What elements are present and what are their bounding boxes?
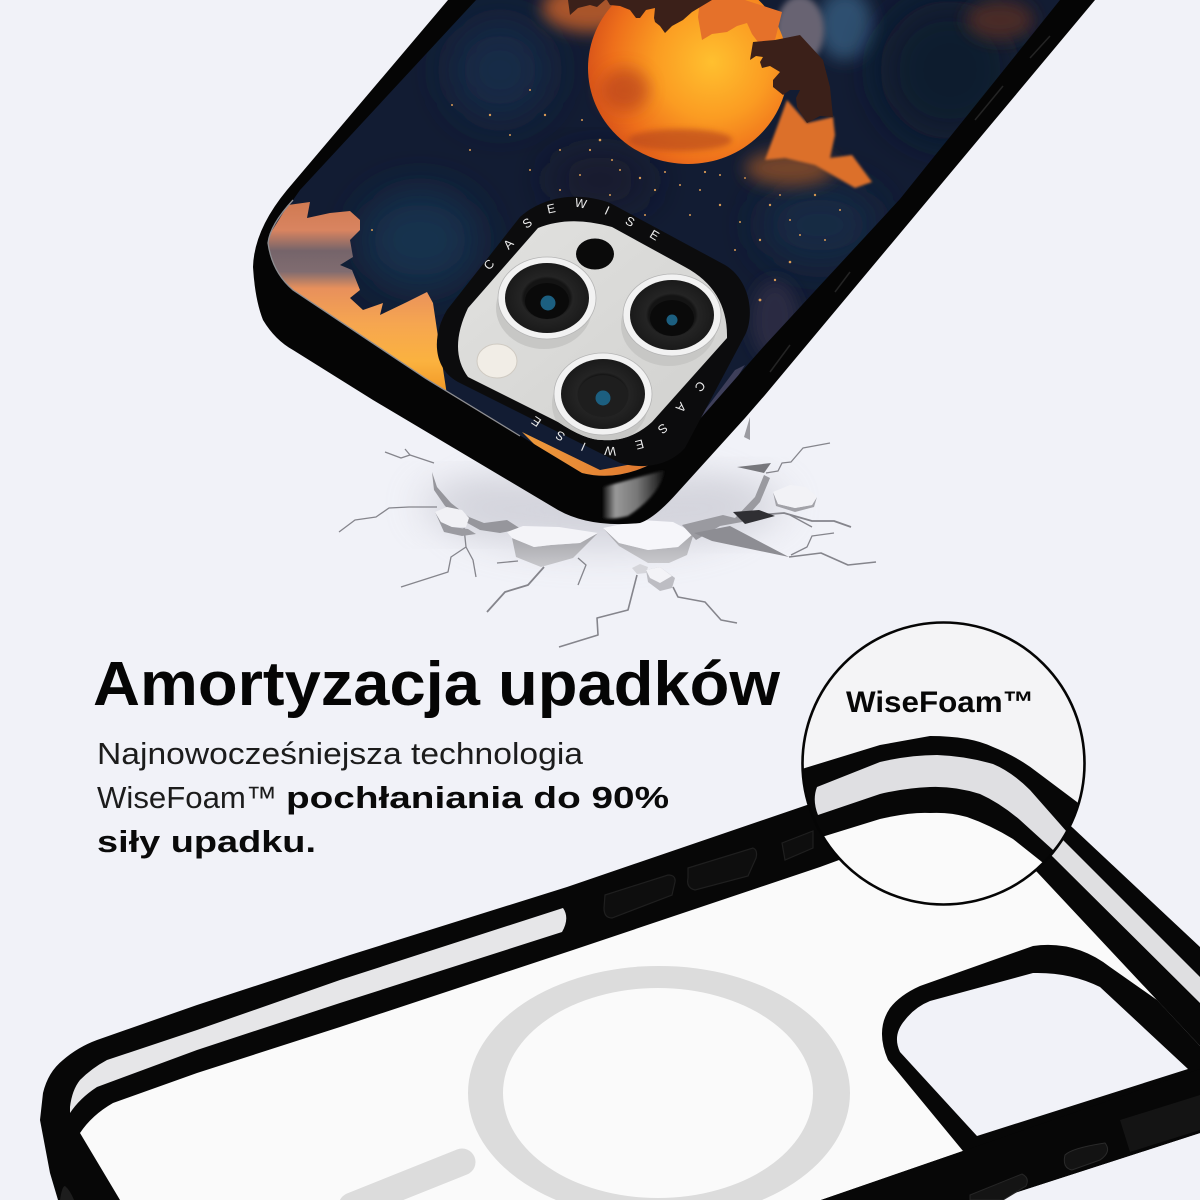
night sky: [360, 0, 1034, 360]
title: Amortyzacja upadków: [93, 650, 781, 719]
magnet alignment pill: [352, 1162, 462, 1200]
transparent case: [40, 770, 1200, 1200]
lens background: [802, 622, 1084, 904]
chunk right: [773, 485, 817, 512]
callout label: WiseFoam™: [846, 686, 1034, 719]
rock chunk center right: [603, 520, 694, 563]
left port: [60, 1186, 74, 1200]
camera bump: [436, 196, 750, 466]
lit foliage patch: [698, 0, 782, 42]
small chunks below: [632, 564, 675, 591]
bump ring: [437, 197, 750, 466]
lower case band: [821, 1069, 1200, 1200]
large plate edge left: [432, 472, 521, 533]
case clear back: [80, 834, 1200, 1200]
lens one: [496, 257, 596, 349]
upper left slot: [70, 908, 566, 1113]
phone with case on top: [253, 0, 1095, 524]
body text: pochłaniania do 90%: [286, 780, 669, 815]
microphone hole: [576, 238, 614, 270]
right purple strip: [701, 365, 745, 418]
orange clouds right of moon: [745, 100, 872, 188]
impact shadow: [420, 472, 785, 548]
glass edge highlight: [268, 200, 520, 436]
camera cutout: [882, 945, 1200, 1151]
case side buttons: [770, 36, 1050, 372]
body text: Najnowocześniejsza technologia: [97, 736, 584, 771]
moon shading: [601, 68, 732, 151]
flash: [477, 344, 517, 378]
volume buttons: [604, 831, 813, 918]
body text: [97, 736, 669, 859]
brand text ring: CASEWISE: [484, 198, 660, 269]
case frame: [40, 770, 1200, 1200]
lower band button: [970, 1174, 1027, 1200]
lenses: [496, 257, 721, 445]
lower band highlight: [1120, 1095, 1200, 1152]
magnified case corner: [804, 736, 1078, 862]
cracked ground illustration: [339, 417, 876, 647]
right plate edge: [682, 417, 789, 557]
lens two: [621, 274, 721, 366]
crack lines: [339, 443, 876, 647]
magnet ring: [468, 966, 850, 1200]
glass outline: [268, 0, 1060, 476]
brand text ring: [484, 198, 704, 456]
circle outline: [802, 622, 1084, 904]
artwork: [262, 0, 1034, 486]
upper right slot: [1030, 818, 1200, 1003]
stars: [371, 89, 841, 301]
phone body: [253, 0, 1095, 524]
top glow: [542, 0, 824, 64]
camera plate: [458, 221, 727, 440]
body text: WiseFoam™: [97, 780, 277, 815]
bottom orange strip: [522, 402, 714, 476]
body text: siły upadku.: [97, 824, 316, 859]
moon: [588, 0, 788, 164]
small chunk left: [435, 507, 476, 536]
corner gloss: [603, 470, 665, 519]
magnifier callout: [801, 621, 1086, 906]
rock chunk center left: [507, 526, 598, 567]
foliage silhouette: [568, 0, 833, 123]
lower band port: [1064, 1143, 1108, 1170]
left clouds: [262, 202, 447, 395]
brand text ring: CASEWISE: [531, 382, 704, 456]
lens three: [552, 353, 652, 445]
